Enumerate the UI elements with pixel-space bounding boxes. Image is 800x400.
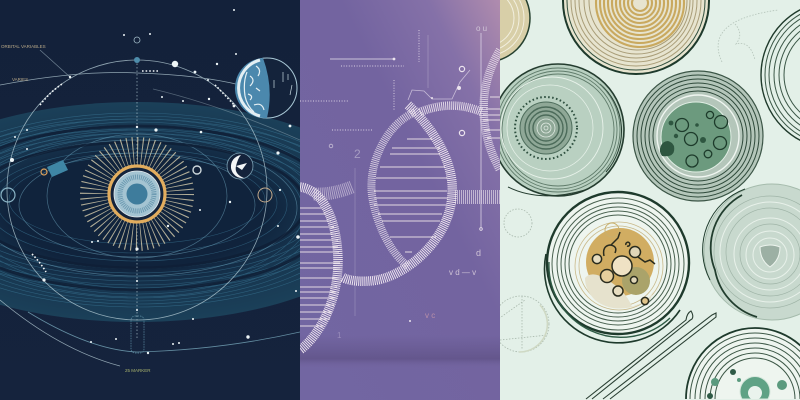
dotted arcs: [32, 71, 235, 272]
dish: shield centre: [703, 184, 800, 320]
small satellite: [1, 37, 272, 202]
annotation glyphs: v c: [425, 311, 435, 320]
central sun: [109, 166, 165, 222]
sun rays: [94, 151, 180, 237]
dish: top-left gold: [442, 0, 530, 62]
annotation glyphs: 1: [337, 331, 342, 340]
orbital band: [0, 102, 392, 322]
dish: concentric target: [492, 64, 624, 196]
annotation glyphs: v d — v: [449, 268, 476, 277]
label: bottom marker: 25 MARKER: [125, 368, 151, 373]
annotation glyphs: 2: [354, 147, 361, 161]
panel: petri dishes: [500, 0, 800, 400]
floor shadow: [300, 335, 500, 369]
dish: far right: [761, 1, 800, 149]
DNA strands: [300, 50, 500, 350]
annotation lines: [300, 30, 481, 316]
annotation nodes: [329, 58, 482, 322]
planet: [235, 58, 297, 118]
annotation glyphs: [337, 24, 487, 340]
capsule marker: [131, 316, 144, 353]
dish: bottom right: [686, 328, 800, 399]
label: variant annotation: VARIES: [12, 77, 28, 82]
annotation glyphs: o u: [476, 24, 487, 33]
crescent moon: [227, 153, 253, 179]
panel: space orbital diagram: [0, 9, 300, 373]
panel: DNA helix: [300, 0, 500, 400]
large orbit rings: [0, 50, 300, 366]
dish: green colonies: [633, 71, 763, 201]
annotation glyphs: d: [476, 248, 481, 258]
dish: top gold: [563, 0, 709, 74]
stars: [10, 9, 300, 354]
crescent residue: [519, 305, 547, 352]
label: orbital annotation: ORBITAL VARIABLES: [1, 44, 46, 49]
swab tool: [586, 311, 716, 399]
DNA rungs: [300, 97, 500, 326]
faint dashed circles: [493, 10, 778, 352]
dish: gold colonies: [544, 192, 689, 343]
